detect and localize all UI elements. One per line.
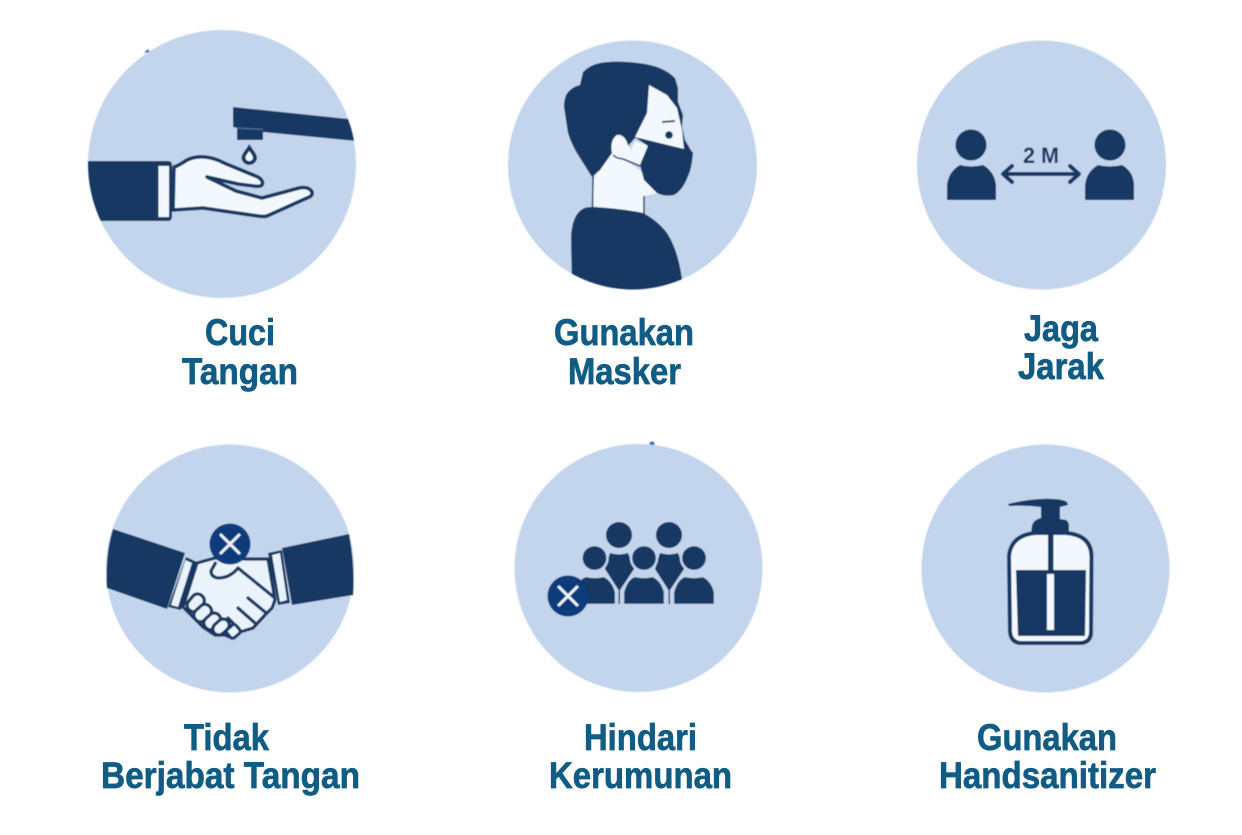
- panel: Cuci Tangan: [80, 30, 356, 392]
- label: Hindari Kerumunan: Kerumunan: [549, 755, 732, 796]
- label: Gunakan Handsanitizer: Handsanitizer: [939, 755, 1156, 796]
- label: Tidak Berjabat Tangan: Berjabat Tangan: [101, 755, 360, 796]
- icon: handshake crossed: [106, 444, 354, 692]
- arrow: distance: [1003, 166, 1079, 182]
- label: Jaga Jarak: Jarak: [1018, 346, 1104, 387]
- icon: cross badge: [548, 576, 588, 616]
- panel: Gunakan Handsanitizer: [922, 444, 1170, 796]
- icon: crowd crossed: [514, 442, 762, 692]
- label: Hindari Kerumunan: [549, 717, 732, 796]
- label: Gunakan Masker: [554, 312, 694, 392]
- panel: Hindari Kerumunan: [514, 442, 762, 796]
- label: Hindari Kerumunan: Hindari: [584, 717, 697, 758]
- label: Jaga Jarak: [1018, 308, 1104, 387]
- ear: [611, 135, 648, 165]
- shirt: [571, 207, 682, 295]
- label: Jaga Jarak: Jaga: [1024, 308, 1098, 349]
- label: Gunakan Handsanitizer: [939, 717, 1156, 796]
- icon: sanitizer bottle: [922, 444, 1170, 692]
- icon: person with mask: [508, 40, 757, 295]
- face: [635, 85, 684, 149]
- hair: [564, 62, 692, 177]
- label: Tidak Berjabat Tangan: [101, 717, 360, 796]
- label: Cuci Tangan: Cuci: [205, 312, 275, 353]
- label: Cuci Tangan: [182, 312, 298, 392]
- panel: Jaga Jarak: [917, 40, 1166, 387]
- panel: Gunakan Masker: [508, 40, 757, 392]
- mask: [636, 138, 693, 196]
- icon: hand washing: [80, 30, 356, 298]
- icon: cross badge: [210, 524, 250, 564]
- neck: [593, 150, 658, 214]
- label: Gunakan Handsanitizer: Gunakan: [977, 717, 1117, 758]
- label: Gunakan Masker: Gunakan: [554, 312, 694, 353]
- label: Cuci Tangan: Tangan: [182, 351, 298, 392]
- label: Tidak Berjabat Tangan: Tidak: [184, 717, 269, 758]
- icon: two metre distance: [917, 40, 1166, 290]
- label: Gunakan Masker: Masker: [568, 351, 681, 392]
- icon: two metre distance: 2 M: [1023, 143, 1059, 168]
- panel: Tidak Berjabat Tangan: [101, 444, 360, 796]
